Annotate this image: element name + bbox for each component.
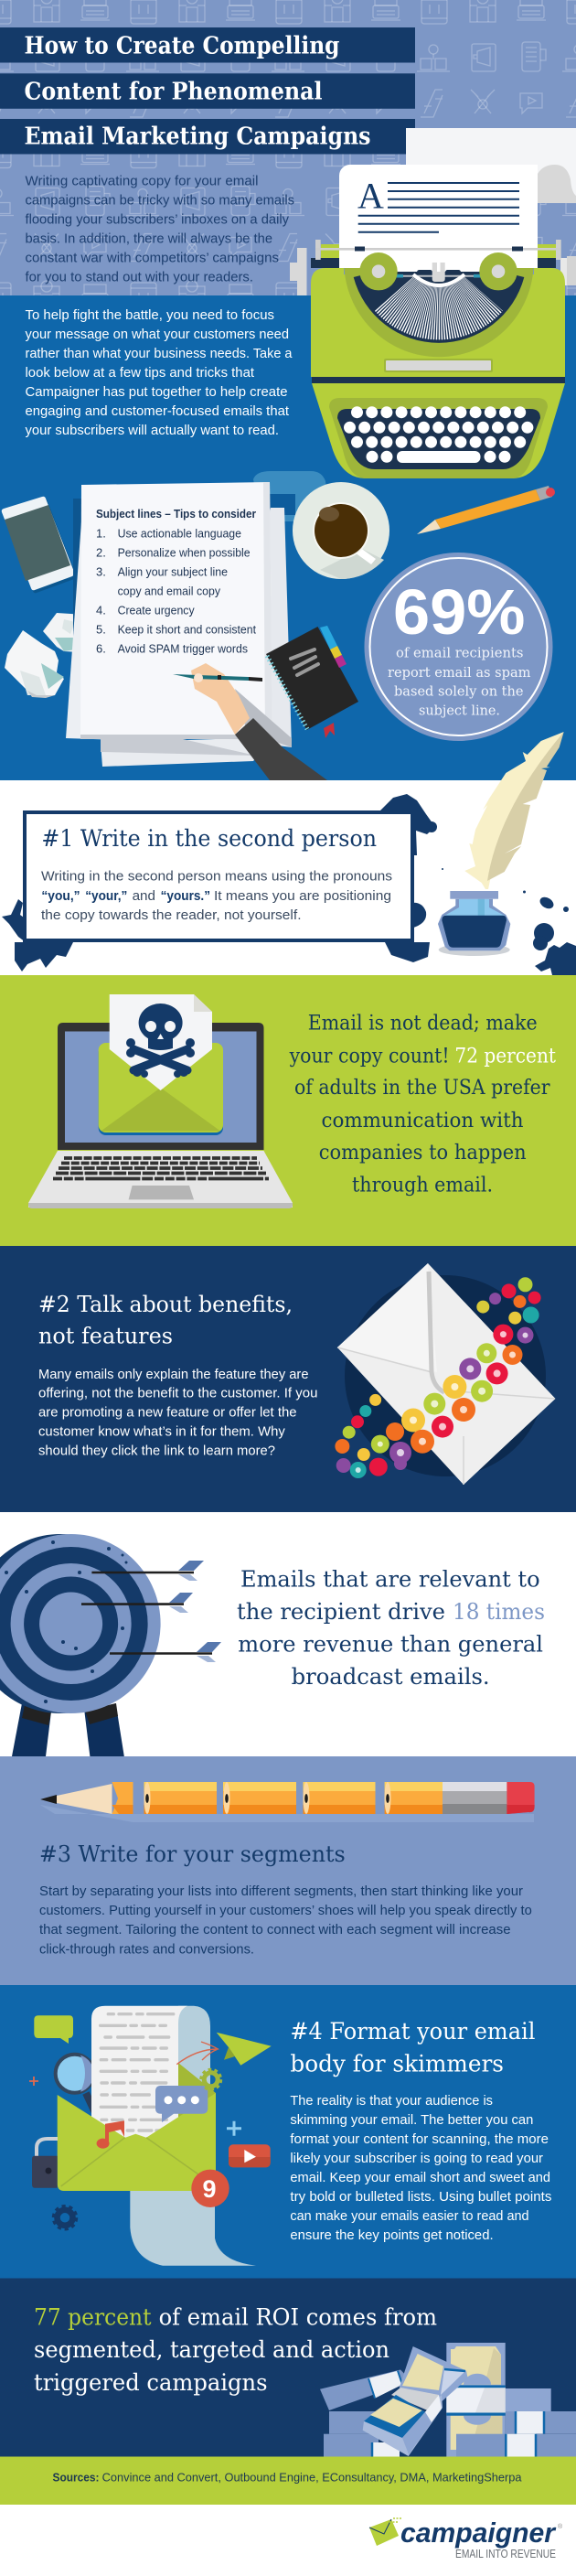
icon: segmented pencil	[40, 1782, 535, 1822]
text block: 18 times more revenue: broadcast emails.	[292, 1663, 490, 1690]
text block: subject line tips: 6.	[96, 641, 106, 655]
icon: crumpled paper	[5, 613, 90, 698]
stat circle: 69 percent: based solely on the	[394, 685, 523, 700]
text block: benefits body: are promoting a new feature or offer let the	[38, 1406, 297, 1421]
text block: email is not dead: your copy count!	[289, 1045, 450, 1068]
text block: second intro paragraph: rather than what your business needs. Take a	[26, 346, 293, 361]
text block: skimmers body: can make your emails easier to read and	[290, 2209, 529, 2224]
stat circle: 69 percent	[364, 553, 552, 741]
text block: intro paragraph: basis. In addition, there will always be the	[26, 231, 272, 246]
icon: notification badge: 9	[203, 2175, 217, 2203]
text block: second intro paragraph: engaging and customer-focused emails that	[26, 403, 290, 419]
panel: tip 1	[0, 732, 576, 975]
text block: subject line tips: Personalize when possible	[118, 545, 251, 559]
icon: typewriter	[290, 128, 576, 478]
panel: tip 3	[0, 1756, 576, 1985]
icon: laptop with malware email	[28, 994, 293, 1208]
text block: second intro paragraph: look below at a few tips and tricks that	[26, 365, 255, 381]
icon: lime gear	[201, 2070, 220, 2089]
panel: relevant emails	[0, 1512, 576, 1756]
text block: subject line tips	[96, 507, 256, 655]
text block: skimmers body: email. Keep your email short and sweet and	[290, 2171, 550, 2185]
icon: ink bottle	[438, 891, 510, 956]
icon: hand with pen	[173, 663, 327, 780]
text block: skimmers body: skimming your email. The better you can	[290, 2113, 533, 2128]
text block: skimmers body	[290, 2094, 551, 2243]
icon: navy gear	[54, 2206, 76, 2228]
stat circle: 69 percent: subject line.	[419, 704, 500, 719]
text block: benefits body: customer know what’s in it for them. Why	[38, 1425, 286, 1440]
panel: footer with logo	[0, 2505, 576, 2576]
icon: archery target with arrows	[0, 1534, 221, 1756]
title: Email Marketing Campaigns	[24, 123, 371, 151]
text block: benefits body: should they click the link to learn more?	[38, 1444, 275, 1458]
text block: second intro paragraph: your subscribers will actually want to read.	[26, 423, 279, 438]
icon: paper plane	[176, 2033, 272, 2066]
icon: smartphone	[2, 497, 76, 593]
text block: email is not dead	[289, 1013, 556, 1197]
text block: email is not dead: of adults in the USA prefer	[294, 1077, 550, 1100]
heading: format for skimmers: body for skimmers	[290, 2051, 504, 2077]
illustration: paper stack	[66, 482, 292, 767]
box: write in the second person: “you,”	[41, 888, 80, 904]
icon: skull and crossbones	[126, 1004, 195, 1078]
text block: 77 percent ROI: triggered campaigns	[34, 2369, 267, 2396]
illustration: open email with long scroll	[29, 2006, 272, 2266]
title: How to Create Compelling	[24, 32, 340, 59]
heading: format for skimmers: #4 Format your email	[290, 2018, 535, 2045]
text block: subject line tips: Subject lines – Tips to consider	[96, 507, 256, 521]
text block: skimmers body: likely your subscriber is going to read your	[290, 2152, 543, 2166]
text block: subject line tips: copy and email copy	[118, 584, 220, 597]
panel: sources: Sources:	[53, 2471, 99, 2484]
heading: talk about benefits: #2 Talk about benefits,	[38, 1292, 293, 1317]
box: write in the second person: Writing in the second person means using the pronouns	[41, 869, 392, 885]
box: write in the second person: “yours.”	[161, 888, 210, 904]
stat circle: 69 percent: of email recipients	[396, 647, 523, 661]
text block: email is not dead: through email.	[352, 1175, 493, 1197]
text block: 18 times more revenue: more revenue than general	[238, 1630, 543, 1657]
title: Content for Phenomenal	[24, 78, 323, 105]
panel: sources	[0, 2457, 576, 2505]
text block: subject line tips: Use actionable language	[118, 526, 241, 540]
text block: intro paragraph: campaigns can be tricky with so many emails	[26, 192, 294, 208]
text block: segments body	[39, 1884, 532, 1957]
heading: write for your segments: #3 Write for your segments	[39, 1841, 346, 1867]
icon: coffee cup	[293, 482, 389, 579]
box: write in the second person: It means you are positioning	[214, 888, 391, 904]
text block: intro paragraph: constant war with competitors’ campaigns	[26, 250, 279, 265]
text block: subject line tips: 3.	[96, 564, 106, 578]
text block: intro paragraph	[26, 173, 294, 284]
text block: subject line tips: Avoid SPAM trigger words	[118, 641, 248, 655]
panel: ROI statistic	[0, 2278, 576, 2457]
text block: intro paragraph: Writing captivating copy for your email	[26, 173, 258, 188]
text block: subject line tips: Align your subject line	[118, 564, 228, 578]
text block: skimmers body: The reality is that your audience is	[290, 2094, 493, 2109]
text block: 77 percent ROI: 77 percent	[34, 2304, 152, 2331]
text block: email is not dead: 72 percent	[454, 1045, 556, 1068]
icon: notification badge	[191, 2170, 229, 2207]
text block: intro paragraph: for you to stand out with your readers.	[26, 269, 253, 284]
icon: campaigner logo mark	[369, 2518, 401, 2546]
text block: benefits body	[38, 1368, 318, 1458]
registered mark: ®	[558, 2523, 563, 2530]
text block: segments body: customers. Putting yourself in your customers’ shoes will help you speak directly to	[39, 1904, 532, 1918]
text block: 18 times more revenue: 18 times	[453, 1598, 545, 1625]
text block: 18 times more revenue	[237, 1566, 545, 1690]
logo wordmark: campaigner	[400, 2517, 557, 2549]
icon: ink splatters	[2, 794, 576, 975]
text block: second intro paragraph: To help fight the battle, you need to focus	[26, 307, 274, 323]
icon: front banded bundle	[363, 2395, 443, 2456]
text block: intro paragraph: flooding your subscribers’ inboxes on a daily	[26, 211, 289, 227]
icon: chat bubble	[155, 2086, 208, 2122]
text block: subject line tips: 1.	[96, 526, 106, 540]
panel: email is not dead	[0, 975, 576, 1246]
text block: benefits body: Many emails only explain the feature they are	[38, 1368, 309, 1382]
panel: hero and tips desk	[0, 0, 576, 780]
text block: segments body: Start by separating your lists into different segments, then start thinking like your	[39, 1884, 523, 1899]
box: write in the second person: “your,”	[85, 888, 127, 904]
text block: second intro paragraph: your message on what your customers need	[26, 327, 289, 342]
panel: tip 4	[0, 1985, 576, 2278]
box: write in the second person	[25, 812, 412, 940]
text block: 18 times more revenue: the recipient drive	[237, 1598, 445, 1625]
tagline: EMAIL INTO REVENUE	[455, 2548, 556, 2560]
text block: second intro paragraph: Campaigner has put together to help create	[26, 384, 287, 400]
text block: subject line tips: Keep it short and consistent	[118, 622, 256, 636]
text block: skimmers body: try bold or bulleted lists. Using bullet points	[290, 2190, 551, 2205]
icon: feather quill	[464, 732, 564, 889]
text block: 77 percent ROI: of email ROI comes from	[159, 2304, 437, 2331]
icon: stacks of money	[320, 2343, 576, 2457]
text block: second intro paragraph	[26, 307, 293, 438]
text block: skimmers body: ensure the key points get noticed.	[290, 2228, 494, 2243]
text block: email is not dead: companies to happen	[319, 1142, 527, 1165]
text block: subject line tips: Create urgency	[118, 603, 195, 617]
icon: pencil	[417, 486, 555, 534]
text block: segments body: that segment. Tailoring the content to connect with each segment will increase	[39, 1923, 510, 1937]
stat circle: 69 percent: 69%	[393, 576, 525, 648]
box: write in the second person: #1 Write in the second person	[41, 825, 377, 852]
panel: sources: Convince and Convert, Outbound Engine, EConsultancy, DMA, MarketingSherpa	[102, 2471, 522, 2484]
icon: glass shadow behind coffee	[253, 471, 329, 521]
icon: lime speech bubble	[34, 2015, 73, 2044]
text block: email is not dead: Email is not dead; make	[308, 1013, 538, 1036]
box: write in the second person: and	[133, 888, 155, 904]
text block: 77 percent ROI: segmented, targeted and action	[34, 2336, 389, 2363]
stat circle: 69 percent: report email as spam	[388, 666, 531, 681]
panel: tip 2	[0, 1246, 576, 1512]
heading: format for skimmers	[290, 2018, 535, 2077]
icon: envelope with app icons	[335, 1263, 556, 1485]
text block: segments body: click-through rates and conversions.	[39, 1942, 254, 1957]
text block: benefits body: offering, not the benefit to the customer. If you	[38, 1387, 318, 1401]
text block: 18 times more revenue: Emails that are relevant to	[240, 1566, 540, 1593]
icon: plus signs	[29, 2077, 241, 2136]
title	[0, 27, 415, 154]
icon: magnifying glass	[56, 2055, 99, 2120]
icon: typewriter: A	[357, 176, 384, 217]
text block: subject line tips: 5.	[96, 622, 106, 636]
text block: 77 percent ROI	[34, 2304, 437, 2396]
text block: email is not dead: communication with	[322, 1110, 523, 1132]
icon: spiral notebook	[266, 626, 358, 738]
icon: upper banded bundle	[391, 2346, 468, 2411]
heading: talk about benefits	[38, 1292, 293, 1349]
heading: talk about benefits: not features	[38, 1324, 173, 1349]
icon: video play	[229, 2144, 271, 2167]
text block: subject line tips: 2.	[96, 545, 106, 559]
box: write in the second person: the copy towards the reader, not yourself.	[41, 907, 302, 923]
text block: skimmers body: format your content for scanning, the more	[290, 2132, 549, 2147]
icon: lock	[32, 2139, 58, 2188]
icon: music note	[97, 2120, 124, 2149]
text block: subject line tips: 4.	[96, 603, 106, 617]
